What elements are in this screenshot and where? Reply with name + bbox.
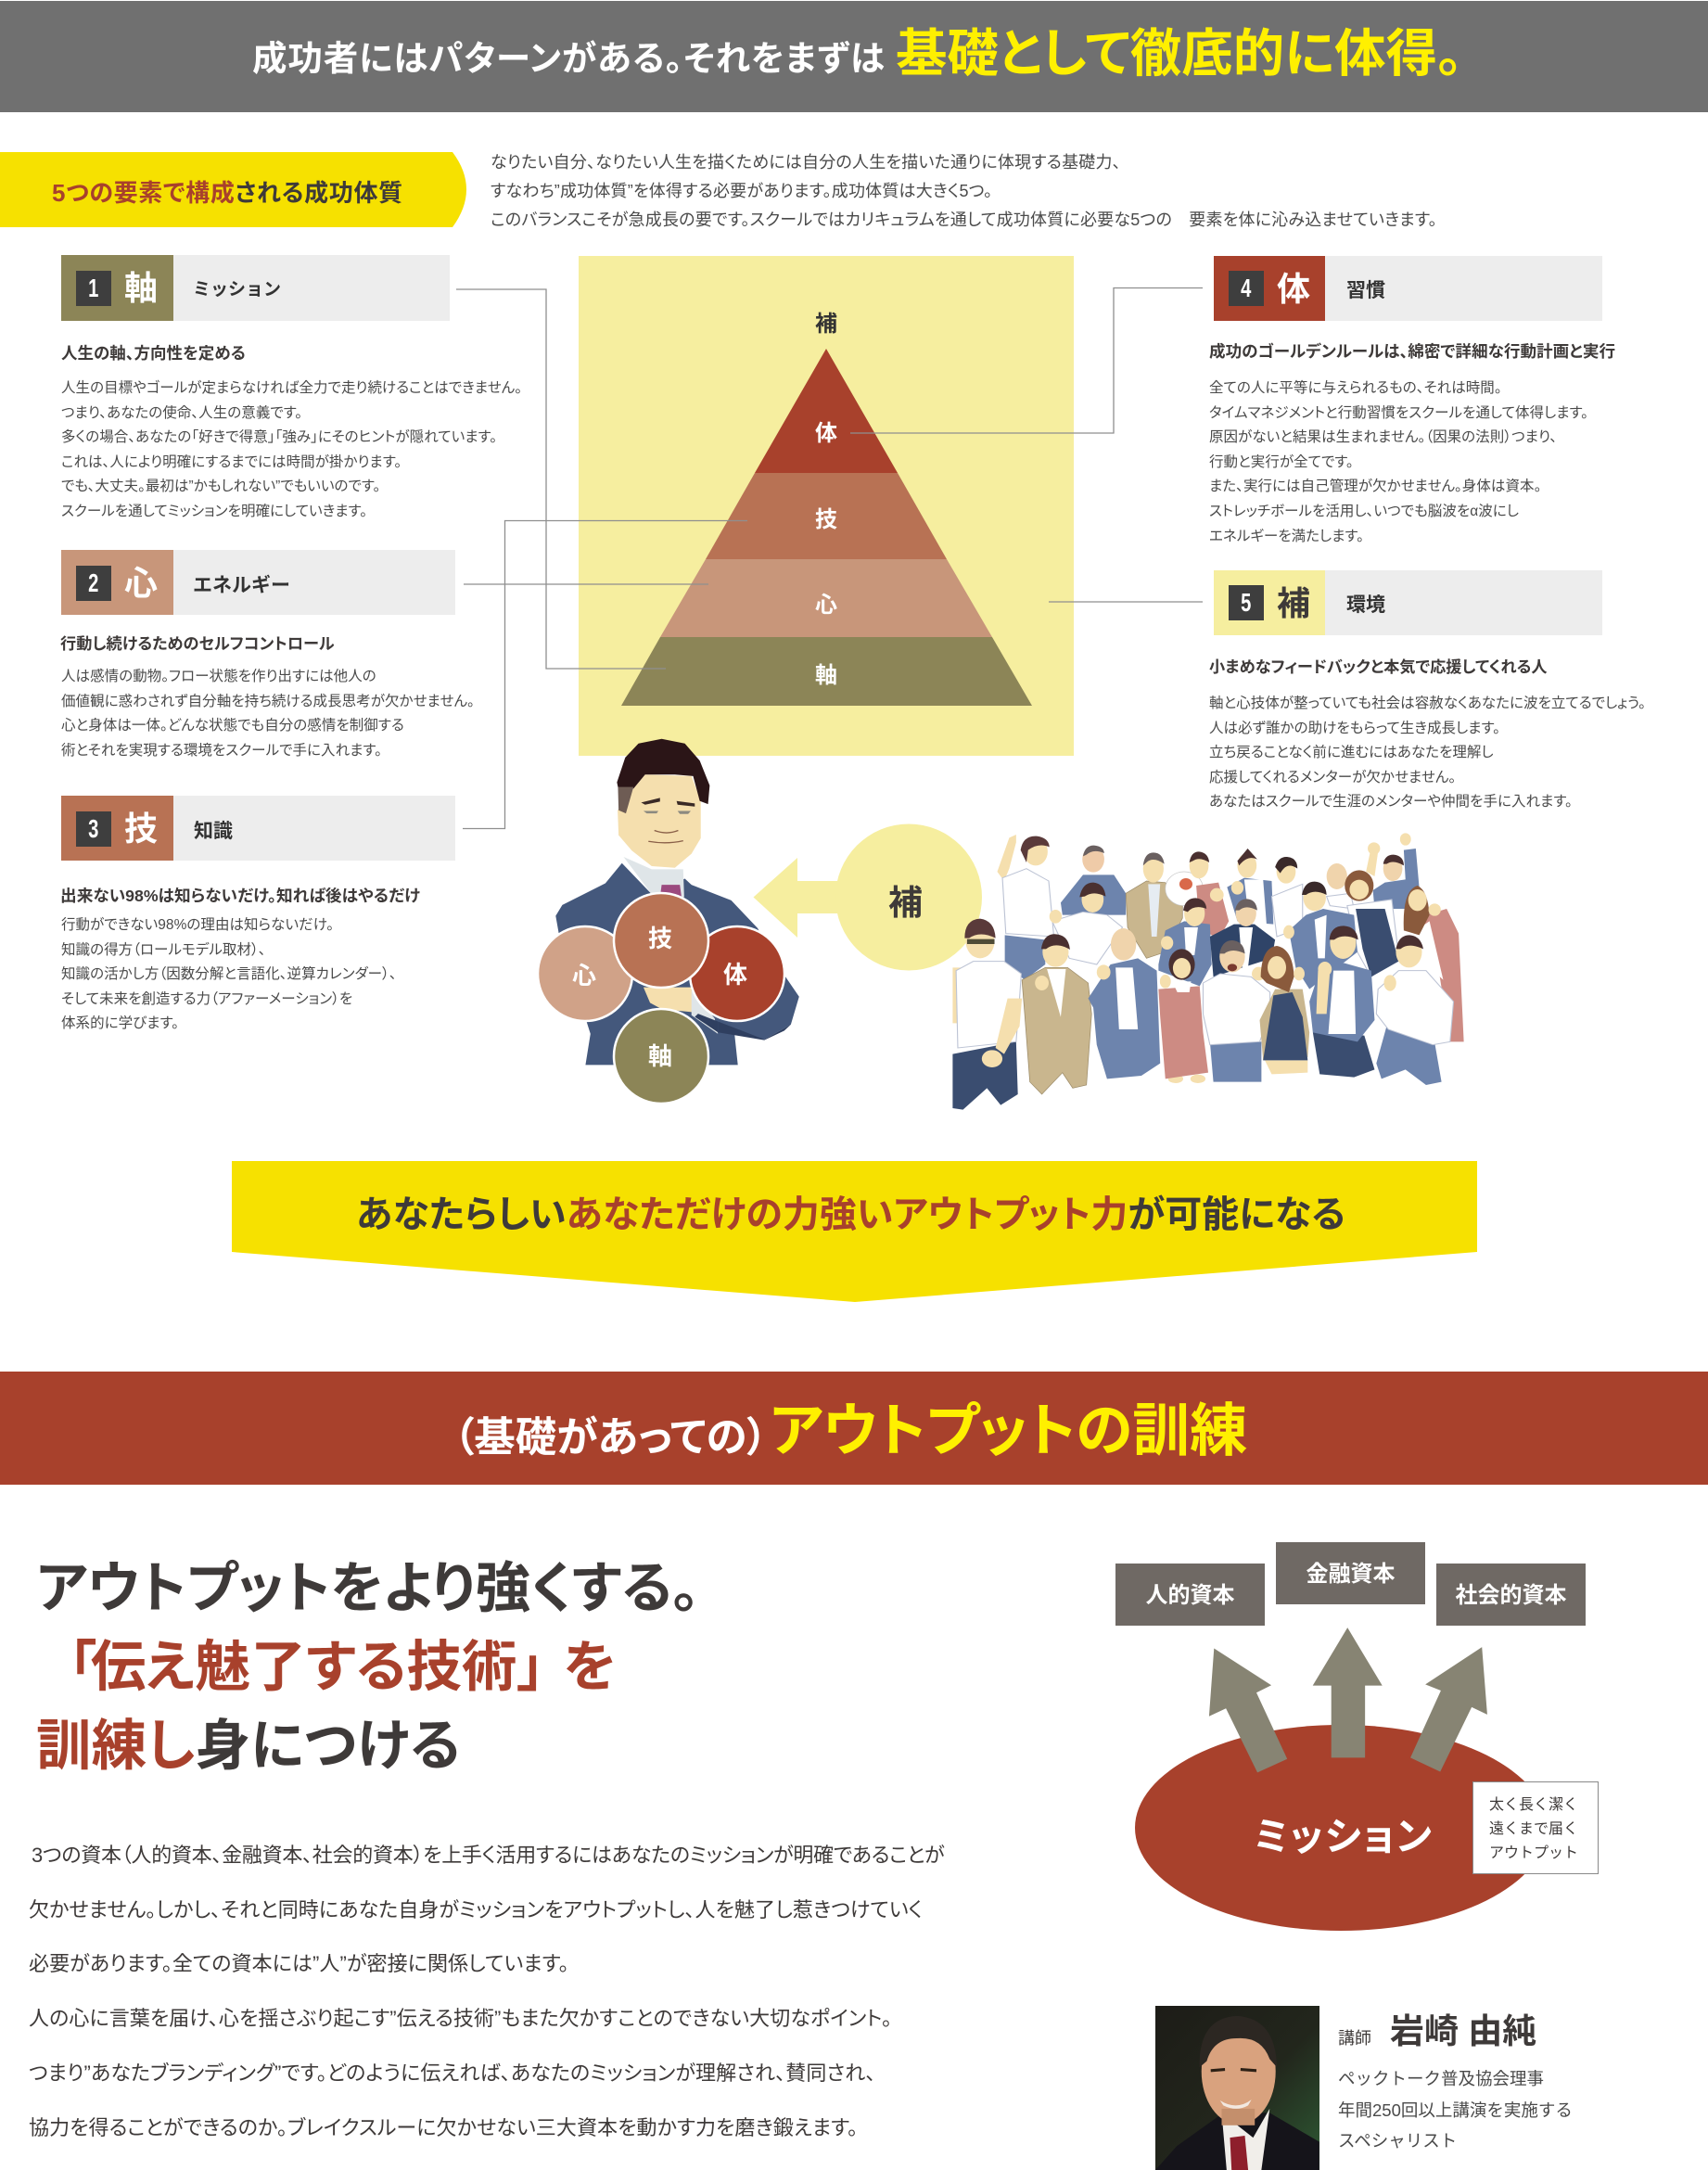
pyramid labels: 技 [815,507,837,532]
element 2: 心: 心 [124,564,158,602]
element 5: 補 [1209,570,1646,810]
body [61,380,522,519]
banner text: あなたらしいあなただけの力強いアウトプット力が可能になる [356,1194,1345,1235]
body paragraph: 必要があります。全ての資本には”人”が密接に関係しています。 [29,1952,569,1975]
body [1209,696,1646,810]
pyramid [621,349,1032,706]
body: 心と身体は一体。どんな状態でも自分の感情を制御する [61,718,404,734]
element 2: 心: 2 [88,568,99,597]
element 4: 体: 習慣 [1346,280,1385,301]
body paragraph [29,1844,944,2139]
instructor text [1338,2012,1573,2151]
body paragraph: 協力を得ることができるのか。ブレイクスルーに欠かせない三大資本を動かす力を磨き鍛えます。 [29,2116,858,2139]
element 5: 補: 補 [1277,584,1310,622]
pyramid labels: 体 [815,421,837,446]
tag text: 5つの要素で構成される成功体質 [52,179,403,207]
補 label: 補 [888,884,923,922]
connector lines [456,287,1203,829]
big heading: 訓練し身につける [36,1715,461,1777]
big heading: アウトプットをより強くする。 [36,1557,700,1619]
illustration: crowd of cheering people [952,833,1464,1110]
body: 人生の目標やゴールが定まらなければ全力で走り続けることはできません。 [61,380,522,396]
profile [1338,2069,1573,2151]
circle labels: 技 [648,925,672,952]
band text white: （基礎があっての） [453,1415,768,1461]
body paragraph: 3つの資本（人的資本、金融資本、社会的資本）を上手く活用するにはあなたのミッションが明確であることが [32,1844,944,1867]
banner text yellow: 基礎として徹底的に体得。 [896,25,1463,83]
profile: スペシャリスト [1338,2131,1457,2151]
heading: 成功のゴールデンルールは、綿密で詳細な行動計画と実行 [1209,342,1615,361]
element 1: 軸: 1 [88,274,99,302]
body: 応援してくれるメンターが欠かせません。 [1209,770,1456,785]
element 2: 心: エネルギー [193,575,290,596]
back row [1005,935,1045,980]
body: そして未来を創造する力（アファーメーション）を [61,991,352,1007]
body paragraph: 欠かせません。しかし、それと同時にあなた自身がミッションをアウトプットし、人を魅了し惹きつけていく [29,1898,923,1921]
callout: output note [1472,1781,1599,1874]
profile: ペックトーク普及協会理事 [1338,2069,1544,2088]
heading: 出来ない98%は知らないだけ。知れば後はやるだけ [60,887,420,905]
body paragraph: 人の心に言葉を届け、心を揺さぶり起こす”伝える技術”もまた欠かすことのできない大切なポイント。 [29,2007,892,2030]
pyramid labels: 軸 [815,663,837,688]
body [1209,380,1588,544]
body: 知識の活かし方（因数分解と言語化、逆算カレンダー）、 [61,966,397,982]
circle labels [572,925,747,1070]
circle labels: 軸 [648,1042,672,1070]
intro text: このバランスこそが急成長の要です。スクールではカリキュラムを通して成功体質に必要な5つの 要素を体に沁み込ませていきます。 [491,211,1437,229]
box: social capital [1436,1564,1586,1626]
box: human capital: 人的資本 [1146,1583,1235,1608]
body [61,668,475,759]
callout: output note: 太く長く潔く [1489,1797,1578,1813]
element 5: 補: 5 [1241,588,1252,617]
three capitals boxes [1115,1542,1586,1626]
body: これは、人により明確にするまでには時間が掛かります。 [61,454,402,470]
body: あなたはスクールで生涯のメンターや仲間を手に入れます。 [1209,794,1573,810]
body: 知識の得方（ロールモデル取材）、 [61,942,266,958]
body: 原因がないと結果は生まれません。（因果の法則）つまり、 [1209,429,1557,445]
element 4: 体 [1209,256,1615,544]
banner text white: 成功者にはパターンがある。それをまずは [252,39,886,78]
top banner [0,1,1708,112]
body: ストレッチボールを活用し、いつでも脳波をα波にし [1209,504,1519,519]
name: 岩崎 由純 [1390,2012,1536,2050]
element 1: 軸 [61,255,522,519]
illustration: man with arms crossed [555,738,799,1065]
circle labels: 体 [723,961,747,989]
profile: 年間250回以上講演を実施する [1338,2100,1573,2120]
heading: 行動し続けるためのセルフコントロール [60,634,335,653]
circle labels: 心 [572,962,596,989]
body paragraph: つまり”あなたブランディング”です。どのように伝えれば、あなたのミッションが理解され、賛同され、 [29,2062,875,2085]
body: でも、大丈夫。最初は”かもしれない”でもいいのです。 [61,479,380,494]
element 3: 技: 3 [88,814,99,843]
element 3: 技 [60,796,455,1031]
intro text: なりたい自分、なりたい人生を描くためには自分の人生を描いた通りに体現する基礎力、 [491,153,1121,172]
body: 人は感情の動物。フロー状態を作り出すには他人の [61,669,376,684]
yellow tag: 5 elements [0,152,466,227]
fists [1050,881,1441,991]
box: human capital [1115,1564,1265,1626]
body [61,916,397,1031]
body: 行動と実行が全てです。 [1209,454,1354,470]
box: financial capital: 金融資本 [1306,1562,1395,1587]
body: 行動ができない98%の理由は知らないだけ。 [61,917,334,933]
body: 全ての人に平等に与えられるもの、それは時間。 [1209,380,1502,396]
body: 人は必ず誰かの助けをもらって生き成長します。 [1209,721,1500,736]
body: 立ち戻ることなく前に進むにはあなたを理解し [1209,745,1494,760]
body: 価値観に惑わされず自分軸を持ち続ける成長思考が欠かせません。 [61,694,475,709]
pyramid labels: 補 [815,312,837,337]
big heading [36,1557,700,1777]
body: 術とそれを実現する環境をスクールで手に入れます。 [61,743,382,759]
element 4: 体: 4 [1241,274,1252,302]
body: つまり、あなたの使命、人生の意義です。 [61,405,302,421]
band text yellow: アウトプットの訓練 [770,1399,1247,1463]
element 1: 軸: 軸 [124,269,158,307]
element 1: 軸: ミッション [193,280,281,300]
element 4: 体: 体 [1277,270,1310,308]
intro text: すなわち”成功体質”を体得する必要があります。成功体質は大きく5つ。 [491,182,992,200]
element 3: 技: 技 [124,810,158,848]
box: financial capital [1276,1542,1425,1604]
pyramid panel [579,256,1074,756]
body: 軸と心技体が整っていても社会は容赦なくあなたに波を立てるでしょう。 [1209,696,1646,711]
arrow from 補 circle [753,823,982,970]
heading: 人生の軸、方向性を定める [61,344,246,363]
body: また、実行には自己管理が欠かせません。身体は資本。 [1209,479,1541,494]
yellow arrow banner [232,1161,1477,1302]
pyramid labels [815,312,837,688]
four element circles [539,892,786,1103]
body: 多くの場合、あなたの「好きで得意」「強み」にそのヒントが隠れています。 [61,429,497,445]
mission label: ミッション [1254,1815,1434,1858]
intro text [491,153,1437,229]
box: social capital: 社会的資本 [1456,1583,1567,1608]
big heading: 「伝え魅了する技術」 を [69,1636,616,1698]
front row [952,1041,1018,1110]
middle row [1052,912,1123,964]
element 5: 補: 環境 [1346,594,1385,616]
body: タイムマネジメントと行動習慣をスクールを通して体得します。 [1209,405,1588,421]
title: 講師 [1338,2029,1371,2048]
section band: output training [0,1372,1708,1485]
heading: 小まめなフィードバックと本気で応援してくれる人 [1209,657,1548,676]
body: スクールを通してミッションを明確にしていきます。 [61,504,367,519]
callout: output note: 遠くまで届く [1489,1821,1578,1837]
callout: output note: アウトプット [1489,1845,1578,1861]
element 3: 技: 知識 [194,821,233,842]
pyramid labels: 心 [815,593,837,618]
body: 体系的に学びます。 [61,1015,179,1031]
body: エネルギーを満たします。 [1209,529,1364,544]
element 2: 心 [60,550,475,759]
